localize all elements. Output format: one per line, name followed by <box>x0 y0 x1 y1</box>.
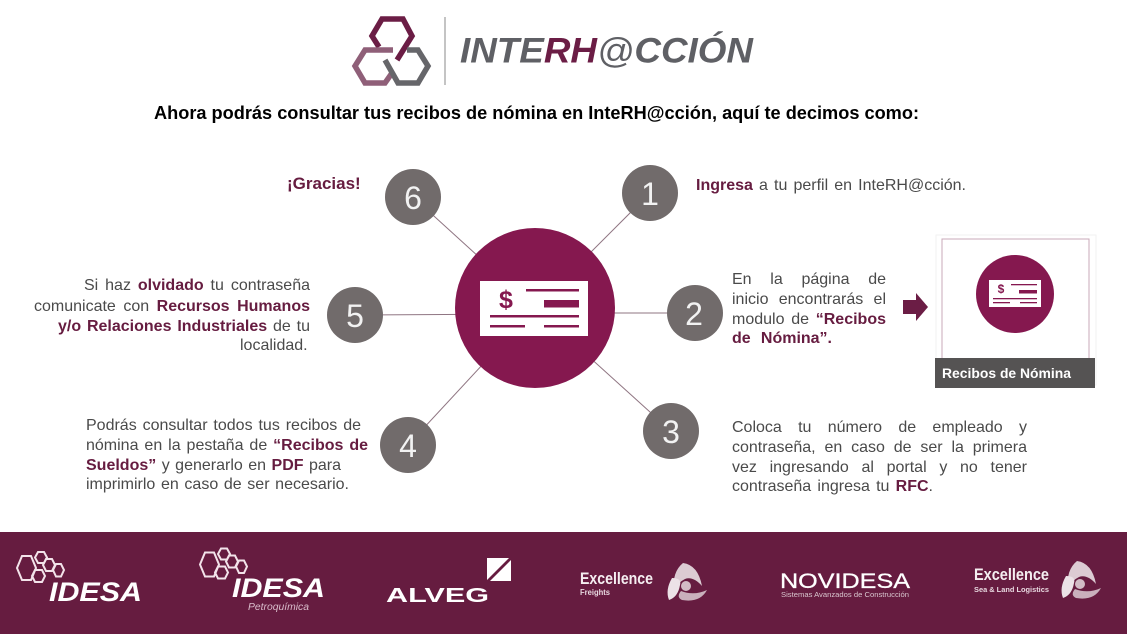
logo: Excellence Freights: Excellence <box>580 569 653 588</box>
logo: Excellence Sea & Land Logistics: Sea & Land Logistics <box>974 585 1049 594</box>
arrow <box>903 293 928 321</box>
module card: Recibos de Nómina <box>935 235 1096 388</box>
text: step 5: comunicate con Recursos Humanos <box>34 298 310 315</box>
text: step 2: de Nómina”. <box>732 330 832 347</box>
text: Gracias: ¡Gracias! <box>287 174 361 193</box>
text: step 3: vez ingresando al portal y no tener <box>732 459 1027 476</box>
text: step 3: contraseña, en caso de ser la primera <box>732 439 1027 456</box>
step 6 circle: 6 <box>404 180 422 216</box>
logo: Excellence Sea & Land Logistics <box>974 561 1101 599</box>
text: step 2: modulo de “Recibos <box>732 311 886 328</box>
text: step 3: Coloca tu número de empleado y <box>732 419 1027 436</box>
central check icon: $ <box>499 286 513 314</box>
logo: InterH@cción: INTERH@CCIÓN <box>460 30 754 70</box>
module card: Recibos de Nómina: $ <box>998 282 1005 296</box>
text: step 3 <box>732 419 1028 495</box>
logo: IDESA <box>17 552 142 607</box>
logo: Excellence Freights: Freights <box>580 588 611 597</box>
step 3 circle: 3 <box>662 414 680 450</box>
logo: ALVEG: ALVEG <box>386 585 489 607</box>
text: step 5: localidad. <box>240 337 308 354</box>
text: step 2: En la página de <box>732 271 886 288</box>
step 1 circle <box>622 165 678 221</box>
logo: NOVIDESA <box>780 570 910 599</box>
central check icon <box>455 228 615 388</box>
text: step 4 <box>86 417 368 493</box>
step 4 circle <box>380 417 436 473</box>
text: step 4: Podrás consultar todos tus recibos de <box>86 417 361 434</box>
step 3 circle <box>643 403 699 459</box>
module card: Recibos de Nómina: Recibos de Nómina <box>942 366 1072 381</box>
text: step 5: Si haz olvidado tu contraseña <box>84 277 310 294</box>
text: step 2 <box>732 271 886 347</box>
logo: IDESA Petroquímica: Petroquímica <box>248 602 309 613</box>
step 4 circle: 4 <box>399 428 417 464</box>
text: step 5: y/o Relaciones Industriales de tu <box>58 318 310 335</box>
text: step 3: contraseña ingresa tu RFC. <box>732 478 933 495</box>
step 6 circle <box>385 169 441 225</box>
logo: IDESA: IDESA <box>49 577 142 607</box>
logo: NOVIDESA: NOVIDESA <box>780 570 910 593</box>
logo: ALVEG <box>386 558 511 607</box>
logo: InterH@cción <box>355 17 754 85</box>
connector lines <box>355 193 695 445</box>
text: step 5 <box>34 277 310 354</box>
step 5 circle <box>327 287 383 343</box>
text: step 4: imprimirlo en caso de ser necesario. <box>86 476 349 493</box>
text: step 2: inicio encontrarás el <box>732 291 886 308</box>
logo: NOVIDESA: Sistemas Avanzados de Construcción <box>781 590 909 599</box>
step 2 circle: 2 <box>685 296 703 332</box>
text: step 4: nómina en la pestaña de “Recibos de <box>86 437 368 454</box>
footer band <box>0 532 1127 634</box>
logo: Excellence Freights <box>580 563 707 601</box>
step 5 circle: 5 <box>346 298 364 334</box>
text: step 1: Ingresa a tu perfil en InteRH@cción. <box>696 177 966 194</box>
logo: IDESA Petroquímica: IDESA <box>232 573 325 603</box>
text: step 4: Sueldos” y generarlo en PDF para <box>86 457 341 474</box>
step 2 circle <box>667 285 723 341</box>
logo: IDESA Petroquímica <box>200 548 325 613</box>
title: Ahora podrás consultar tus recibos de nómina en InteRH@cción, aquí te decimos como: <box>154 103 919 123</box>
logo: Excellence Sea & Land Logistics: Excellence <box>974 565 1049 584</box>
step 1 circle: 1 <box>641 176 659 212</box>
